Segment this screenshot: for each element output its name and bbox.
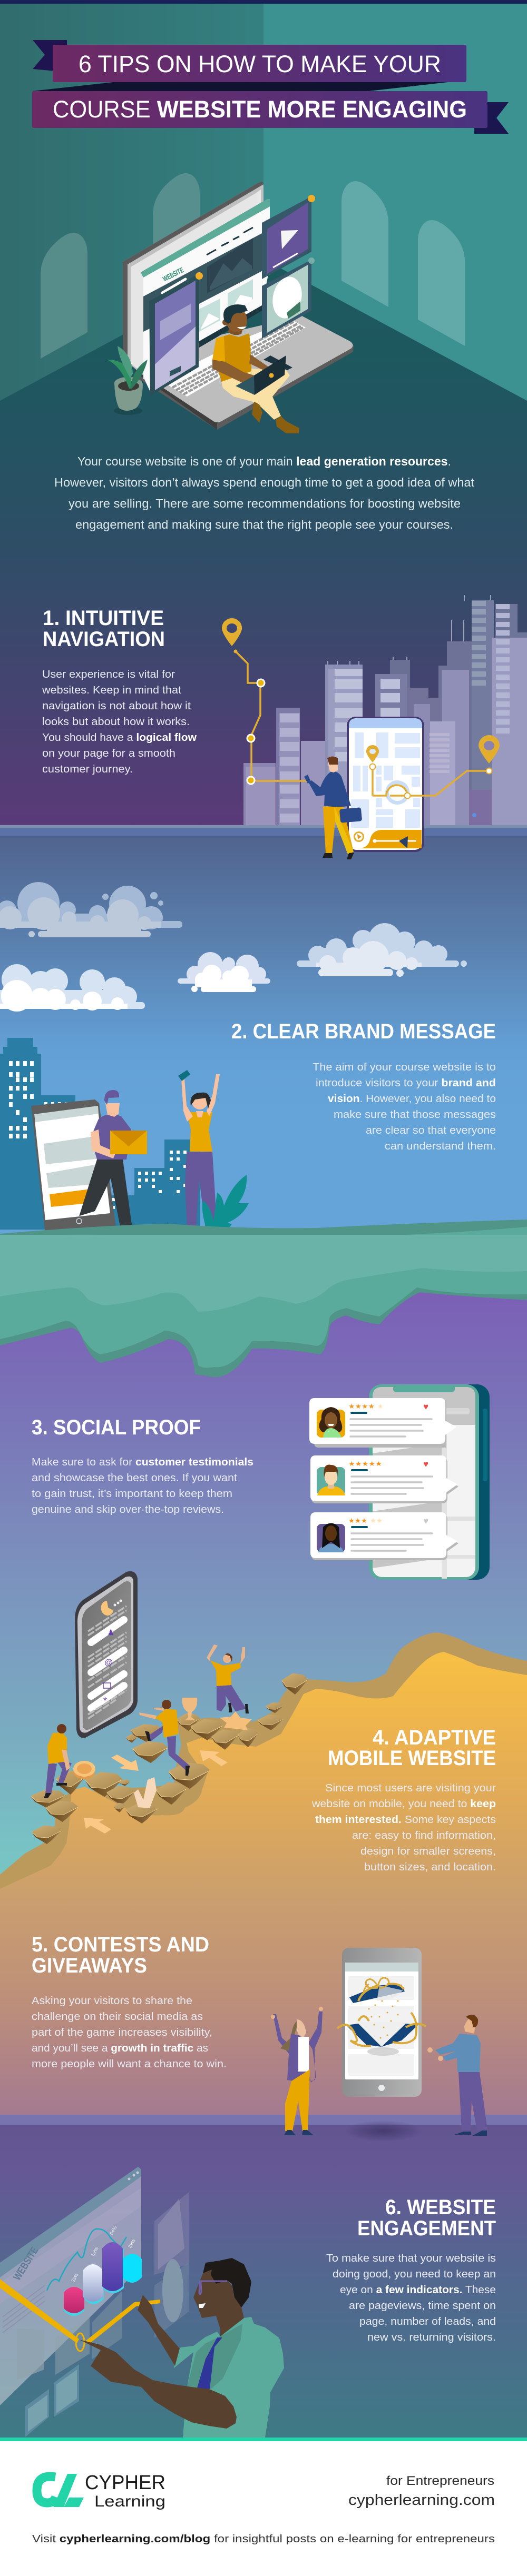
- tip 2 text: are clear so that everyone: [366, 1124, 496, 1136]
- value labels: 35%: [70, 2272, 80, 2283]
- gift lid: [349, 1978, 405, 2003]
- road: [0, 825, 527, 1269]
- cloud A back: [0, 882, 182, 929]
- review card 3: ♥: [423, 1516, 428, 1526]
- tip 4 text: [311, 1782, 496, 1873]
- tip 6 heading: ENGAGEMENT: [357, 2217, 496, 2240]
- ground waves mid layer: [0, 1227, 527, 1368]
- tip 4 stepping rocks: [31, 1673, 308, 1844]
- small laptop: [264, 355, 292, 370]
- footer blog line: Visit cypherlearning.com/blog for insightful posts on e-learning for entrepreneurs: [32, 2533, 495, 2545]
- hero left wall: [0, 4, 264, 401]
- tip 4 isometric phone: ♟: [108, 1628, 114, 1637]
- tip 1 text: customer journey.: [42, 763, 133, 775]
- tip 2 text: make sure that those messages: [334, 1108, 496, 1121]
- tip 1 text: User experience is vital for: [42, 668, 175, 680]
- trophy: [182, 1698, 197, 1720]
- bar chart: cylinders: 64%: [109, 2225, 118, 2236]
- tip 1 text: navigation is not about how it: [42, 700, 191, 712]
- tip 4 text: button sizes, and location.: [364, 1861, 496, 1873]
- tip 6 text: [326, 2252, 496, 2343]
- tip 1 text: [42, 668, 197, 775]
- tip 1 phone with map: [347, 717, 489, 852]
- cloud B back: [0, 964, 145, 1009]
- intro paragraph: you are selling. There are some recommendations for boosting website: [69, 497, 461, 510]
- logo wordmark: [85, 2472, 165, 2510]
- climber 2: [167, 1736, 190, 1771]
- gift box: [337, 2013, 426, 2047]
- tip 1 city skyline: [243, 595, 527, 827]
- tip 2 text: The aim of your course website is to: [313, 1061, 496, 1073]
- video panel: [262, 196, 311, 279]
- cloud A front: [0, 897, 161, 937]
- tip 4 text: design for smaller screens,: [360, 1845, 496, 1857]
- crystals: [134, 1777, 157, 1808]
- review card 1: ♥: [423, 1402, 428, 1412]
- review card 3: ★★★: [348, 1517, 367, 1524]
- shirt: [174, 2317, 284, 2438]
- tip 5 text: part of the game increases visibility,: [32, 2026, 212, 2038]
- review card 2: [310, 1455, 458, 1503]
- tip 5 text: more people will want a chance to win.: [32, 2058, 227, 2070]
- tip 5 man: [427, 2015, 487, 2136]
- footer: [0, 2438, 527, 2576]
- tip 6 text: doing good, you need to keep an: [333, 2268, 496, 2280]
- cloud D: [297, 923, 467, 967]
- review card 1: ★: [377, 1402, 384, 1410]
- hero right wall: [264, 4, 527, 401]
- tip 5 text: and you’ll see a growth in traffic as: [32, 2042, 208, 2054]
- tie: [197, 2337, 222, 2389]
- tip 5 heading: [32, 1933, 209, 1977]
- raised arm: [138, 2295, 180, 2366]
- tip 1 text: You should have a logical flow: [42, 731, 197, 744]
- tip 2 teal city: [0, 1038, 200, 1230]
- top bar: [0, 0, 527, 4]
- chat panel: [262, 260, 311, 339]
- logo mark: [37, 2474, 84, 2507]
- tip 3 text: Make sure to ask for customer testimonials: [32, 1456, 253, 1468]
- tip 3 text: genuine and skip over-the-top reviews.: [32, 1503, 224, 1515]
- review card 1: [309, 1398, 456, 1448]
- bar chart: cylinders: [47, 2225, 142, 2316]
- title line 2: COURSE WEBSITE MORE ENGAGING: [53, 96, 467, 123]
- ground waves light layer: [0, 1235, 527, 1312]
- face and neck: [193, 2270, 244, 2336]
- review card 3: ★★: [370, 1517, 383, 1524]
- intro paragraph: engagement and making sure that the right people see your courses.: [75, 518, 453, 531]
- tip 6 text: page, number of leads, and: [359, 2315, 496, 2327]
- cloud B front: [0, 980, 128, 1012]
- intro paragraph: Your course website is one of your main lead generation resources.: [77, 454, 451, 468]
- tip 6 heading: 6. WEBSITE: [385, 2196, 496, 2219]
- tip 5 heading: 5. CONTESTS AND: [32, 1933, 209, 1956]
- laptop lid: [123, 182, 264, 375]
- tip 2 text: can understand them.: [385, 1140, 496, 1152]
- logo wordmark: CYPHER: [85, 2472, 165, 2494]
- tip 4 isometric phone: *: [103, 1696, 107, 1706]
- tip 4 collectibles: [73, 1698, 252, 1808]
- footer contact: for Entrepreneurs: [386, 2474, 494, 2488]
- tip 2 tilted phone: [31, 1099, 116, 1235]
- tip 1 text: looks but about how it works.: [42, 716, 190, 728]
- icon: potted plant: [107, 346, 148, 415]
- mobile panel: [149, 274, 199, 396]
- tip 3 heading: 3. SOCIAL PROOF: [32, 1416, 201, 1439]
- tip 3 text: [32, 1456, 253, 1515]
- tip 1 right pin: [479, 735, 500, 774]
- tip 4 text: are: easy to find information,: [352, 1829, 496, 1841]
- tip 6 text: new vs. returning visitors.: [367, 2331, 496, 2343]
- hero illustration: laptop with person: WEBSITE: [161, 265, 185, 283]
- climber 3: [217, 1685, 246, 1711]
- keyboard: [169, 320, 306, 397]
- person head: [228, 316, 245, 335]
- tip 5 text: Asking your visitors to share the: [32, 1995, 192, 2007]
- clouds: [0, 882, 467, 1012]
- person torso: [212, 333, 251, 382]
- glasses: [199, 2281, 227, 2294]
- browser window: [143, 206, 270, 379]
- tip 5 text: challenge on their social media as: [32, 2010, 203, 2023]
- climber 1: [45, 1762, 57, 1795]
- section 5 strip: [0, 2115, 527, 2438]
- tip 4 text: Since most users are visiting your: [325, 1782, 496, 1794]
- title line 1: 6 TIPS ON HOW TO MAKE YOUR: [79, 51, 441, 77]
- review card 1: ★★★★: [348, 1402, 375, 1410]
- footer contact: cypherlearning.com: [348, 2492, 495, 2509]
- tip 4 climbers: [44, 1644, 249, 1798]
- tip 4 heading: MOBILE WEBSITE: [328, 1747, 496, 1770]
- tip 4 mountain front layer: [0, 1652, 527, 2115]
- background: hero floor to dusk: [0, 0, 527, 826]
- review card 3: [310, 1512, 458, 1560]
- person arms: [212, 360, 255, 383]
- coin: [73, 1762, 95, 1779]
- laptop base: [136, 345, 354, 430]
- cloud C: [178, 952, 270, 984]
- tip 5 phone with gift: [337, 1948, 426, 2142]
- review card 2: ♥: [423, 1459, 428, 1469]
- tip 2 woman with phone: [178, 1070, 220, 1240]
- tip 4 heading: [328, 1726, 496, 1770]
- tip 1 route with pins: [222, 618, 310, 785]
- tip 6 browser panel: [0, 2167, 141, 2405]
- intro paragraph: However, visitors don’t always spend enough time to get a good idea of what: [54, 475, 475, 489]
- tip 2 text: introduce visitors to your brand and: [316, 1077, 496, 1089]
- tip 6 text: eye on a few indicators. These: [340, 2284, 496, 2296]
- tip 6 browser panel: WEBSITE: [12, 2245, 41, 2283]
- tip 2 heading: 2. CLEAR BRAND MESSAGE: [231, 1020, 496, 1043]
- hair: [203, 2258, 251, 2307]
- tip 4 mountain back layer: [0, 1632, 527, 1896]
- tip 3 text: and showcase the best ones. If you want: [32, 1472, 237, 1484]
- tip 6 heading: [357, 2196, 496, 2240]
- tip 4 isometric phone: [75, 1571, 138, 1738]
- tip 2 delivery man: [78, 1090, 147, 1240]
- tip 3 text: to gain trust, it’s important to keep them: [32, 1488, 232, 1500]
- section 3/4 sky: [0, 1264, 527, 1896]
- tip 4 text: website on mobile, you need to keep: [311, 1798, 496, 1810]
- hero illustration: laptop with person: [123, 182, 354, 433]
- tip 5 heading: GIVEAWAYS: [32, 1954, 147, 1977]
- tip 4 heading: 4. ADAPTIVE: [373, 1726, 496, 1749]
- tip 1 heading: NAVIGATION: [43, 628, 165, 651]
- review card 2: ★★★★★: [348, 1460, 382, 1468]
- person legs: [221, 369, 290, 420]
- tip 6 man drawing: [0, 2258, 284, 2438]
- logo wordmark: Learning: [94, 2493, 165, 2510]
- tip 3 phone: [369, 1384, 490, 1580]
- tip 4 isometric phone: @: [104, 1658, 113, 1667]
- tip 6 text: are pageviews, time spent on: [349, 2300, 496, 2312]
- tip 5 woman: [271, 2007, 323, 2135]
- faded side panels: [25, 2192, 189, 2437]
- tip 4 arrows: [84, 1750, 228, 1834]
- bar chart: cylinders: 52%: [90, 2246, 100, 2257]
- title banner: [32, 40, 509, 134]
- tip 2 plants: [160, 1175, 249, 1240]
- tip 2 text: [313, 1061, 496, 1152]
- intro paragraph: [54, 454, 475, 531]
- wall windows: [41, 173, 465, 359]
- tip 1 man with briefcase: [304, 756, 362, 859]
- tip 1 heading: 1. INTUITIVE: [43, 607, 164, 630]
- star: [220, 1711, 252, 1730]
- tip 2 text: vision. However, you also need to: [328, 1093, 496, 1105]
- tip 4 text: them interested. Some key aspects: [315, 1814, 496, 1826]
- tip 1 text: websites. Keep in mind that: [42, 684, 181, 696]
- tip 1 text: on your page for a smooth: [42, 747, 175, 759]
- bar chart: cylinders: 39%: [127, 2238, 136, 2249]
- pointing arm: [79, 2340, 237, 2429]
- footer contact: [348, 2474, 495, 2509]
- tip 5 text: [32, 1995, 227, 2070]
- ground waves dark layer: [0, 1220, 527, 1377]
- tip 1 heading: [43, 607, 165, 651]
- tip 6 text: To make sure that your website is: [326, 2252, 496, 2264]
